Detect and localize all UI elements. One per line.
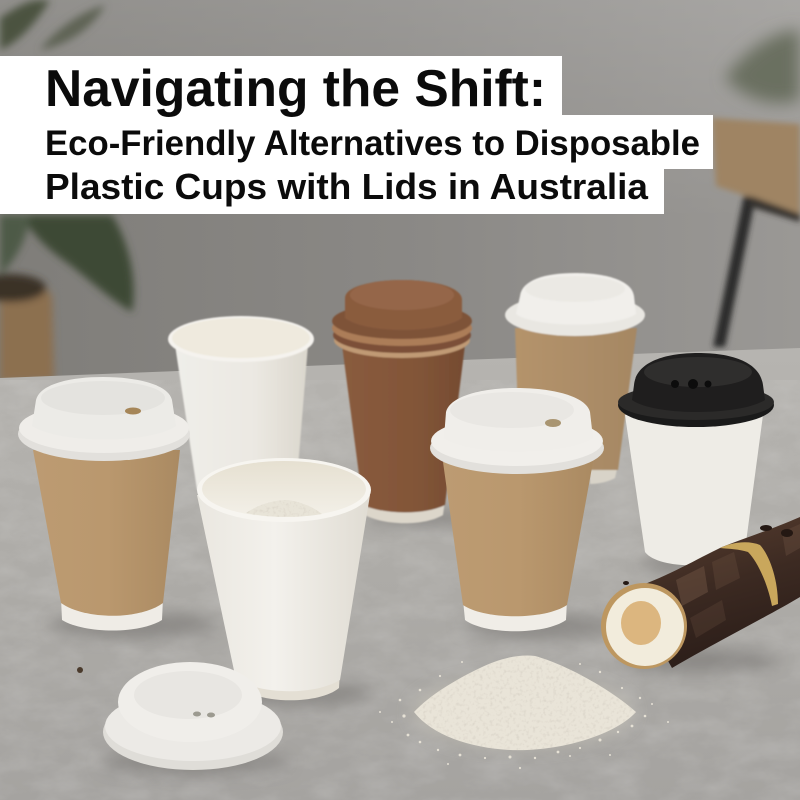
- cup: left kraft with white lid: [18, 377, 190, 630]
- lid dome: [345, 280, 462, 330]
- cup: front kraft with white lid: [430, 388, 604, 631]
- lid band: [505, 294, 645, 336]
- lid band: [430, 422, 604, 474]
- table top: [712, 118, 800, 214]
- cup body: [625, 415, 763, 565]
- plant pot: [0, 278, 54, 382]
- cane body: [628, 517, 800, 668]
- lid outer rim: [103, 694, 283, 770]
- bud scars: [623, 525, 793, 585]
- cup: black lid white body: [618, 353, 774, 565]
- base ring: [363, 500, 445, 523]
- cup body: [197, 495, 370, 691]
- cut face rim: [601, 583, 687, 669]
- cup body: [175, 345, 308, 490]
- cup: stacked brown lids: [332, 280, 472, 523]
- lid top: [41, 381, 165, 415]
- sip holes: [671, 379, 712, 389]
- cut face pith: [606, 588, 684, 666]
- pile body: [414, 656, 636, 750]
- table mottling: [0, 380, 800, 800]
- lid dome: [444, 388, 593, 452]
- lid band: [618, 383, 774, 427]
- lid top: [450, 392, 574, 428]
- bagasse powder pile: [379, 656, 669, 769]
- sip hole: [545, 419, 561, 427]
- cup body: [33, 450, 180, 616]
- background plant top left: [0, 0, 105, 50]
- cup interior: [172, 318, 310, 358]
- sip hole: [125, 408, 141, 414]
- background plant bottom left: [0, 215, 134, 382]
- cut face core: [621, 601, 661, 645]
- title banner: [0, 56, 713, 214]
- bark patches: [676, 524, 800, 638]
- cup interior: [202, 461, 366, 517]
- base ring: [590, 465, 618, 484]
- lid top: [134, 671, 242, 719]
- lid top: [525, 276, 625, 302]
- lid dome: [118, 662, 262, 742]
- cup: back plain white: [168, 316, 314, 490]
- lid top: [644, 357, 752, 387]
- cup shadows: [50, 509, 780, 774]
- cup body: [342, 345, 465, 512]
- base ring: [463, 600, 567, 631]
- title line 3: Plastic Cups with Lids in Australia: [45, 166, 649, 207]
- scattered specks: [379, 661, 669, 769]
- cup rim: [168, 316, 314, 362]
- lid dome: [516, 273, 636, 324]
- cane node: [720, 542, 778, 606]
- lid dome: [32, 377, 176, 440]
- powder in cup: [246, 500, 322, 517]
- title line 2: Eco-Friendly Alternatives to Disposable: [45, 123, 700, 163]
- table leg: [713, 195, 755, 347]
- sugarcane stalk: [601, 517, 800, 669]
- background side table: [712, 118, 800, 347]
- background plant top right: [725, 30, 800, 103]
- lid rings: [334, 322, 470, 358]
- pile spread: [412, 676, 632, 748]
- soil: [0, 274, 46, 302]
- cup rim: [197, 458, 371, 522]
- base ring: [238, 670, 340, 700]
- lid dome: [632, 353, 765, 412]
- leaves: [22, 215, 134, 312]
- loose white lid: [103, 662, 283, 770]
- title block: [0, 56, 713, 214]
- marble table surface: [0, 348, 800, 800]
- lid band: [18, 407, 190, 461]
- title line 1: Navigating the Shift:: [45, 60, 546, 118]
- cup: front plain white with powder: [197, 458, 371, 700]
- background wall: [0, 0, 800, 385]
- base ring: [61, 598, 163, 630]
- speck on table: [77, 667, 83, 673]
- cup body: [443, 462, 593, 616]
- cup body: [515, 328, 637, 470]
- table rail: [748, 196, 800, 222]
- cup: back kraft with white lid: [505, 273, 645, 484]
- sip holes: [193, 712, 201, 716]
- lid top: [350, 280, 454, 310]
